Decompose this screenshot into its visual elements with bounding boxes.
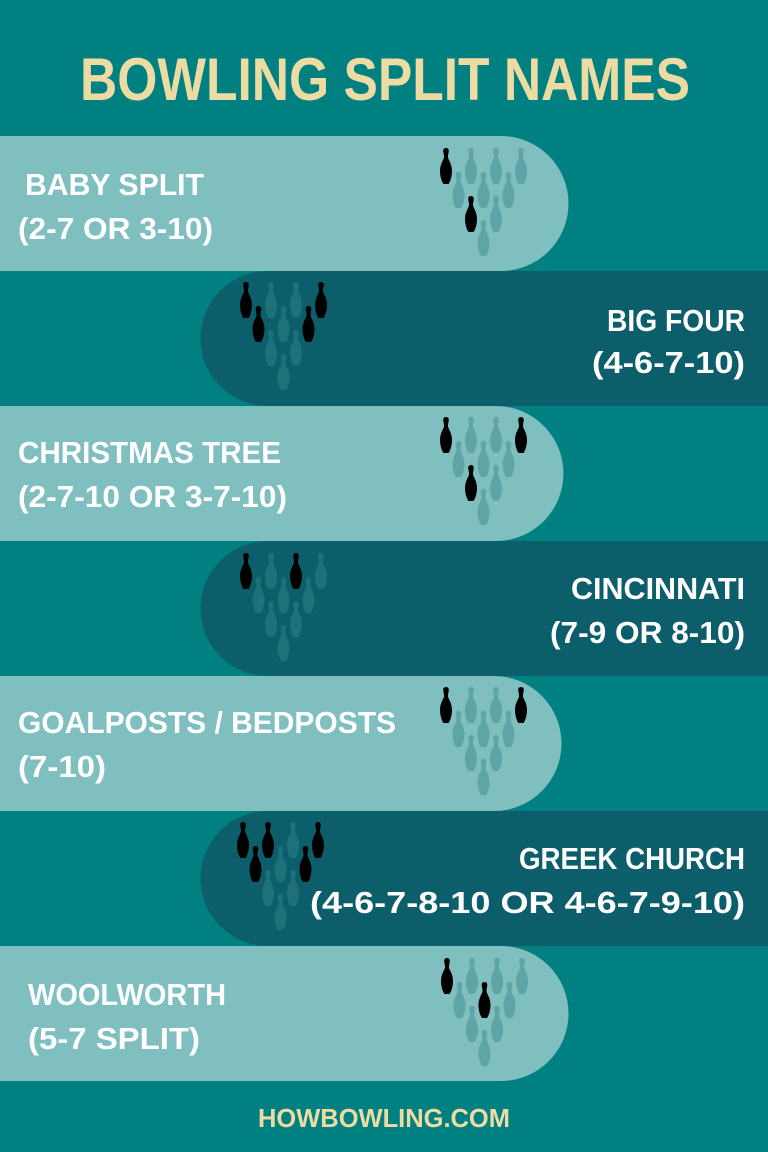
panel: baby split [0,136,568,271]
footer: HOWBOWLING.COM [258,1103,510,1133]
panel: baby split: BABY SPLIT [25,167,204,202]
panel: woolworth: (5-7 SPLIT) [28,1021,200,1056]
panel: goalposts: (7-10) [18,749,106,784]
icon: pins 2-7-10 [440,417,527,525]
panel: christmas tree: (2-7-10 OR 3-7-10) [18,479,287,514]
panel: big four: BIG FOUR [607,303,745,338]
panel: woolworth [0,946,568,1081]
panel: big four [200,271,768,406]
panel: christmas tree: CHRISTMAS TREE [18,435,281,470]
icon: pins 7-10 [440,687,527,795]
icon: pins 4-6-7-10 [240,282,327,390]
panel: christmas tree [0,406,563,541]
panel: cincinnati [200,541,768,676]
panel: cincinnati: (7-9 OR 8-10) [550,615,745,650]
panel: goalposts [0,676,561,811]
icon: pins 5-7 [441,958,528,1066]
panel: baby split: (2-7 OR 3-10) [18,211,213,246]
icon: pins 2-7 [440,148,527,256]
panel: goalposts: GOALPOSTS / BEDPOSTS [18,705,396,740]
icon: pins 4-6-7-8-10 [237,822,324,930]
icon: pins 7-9 [240,553,327,661]
panel: cincinnati: CINCINNATI [571,571,745,606]
panel: big four: (4-6-7-10) [592,345,745,380]
panel: woolworth: WOOLWORTH [28,977,226,1012]
panel: greek church: GREEK CHURCH [519,841,745,876]
panel: greek church [200,811,768,946]
panel: greek church: (4-6-7-8-10 OR 4-6-7-9-10) [310,885,745,920]
